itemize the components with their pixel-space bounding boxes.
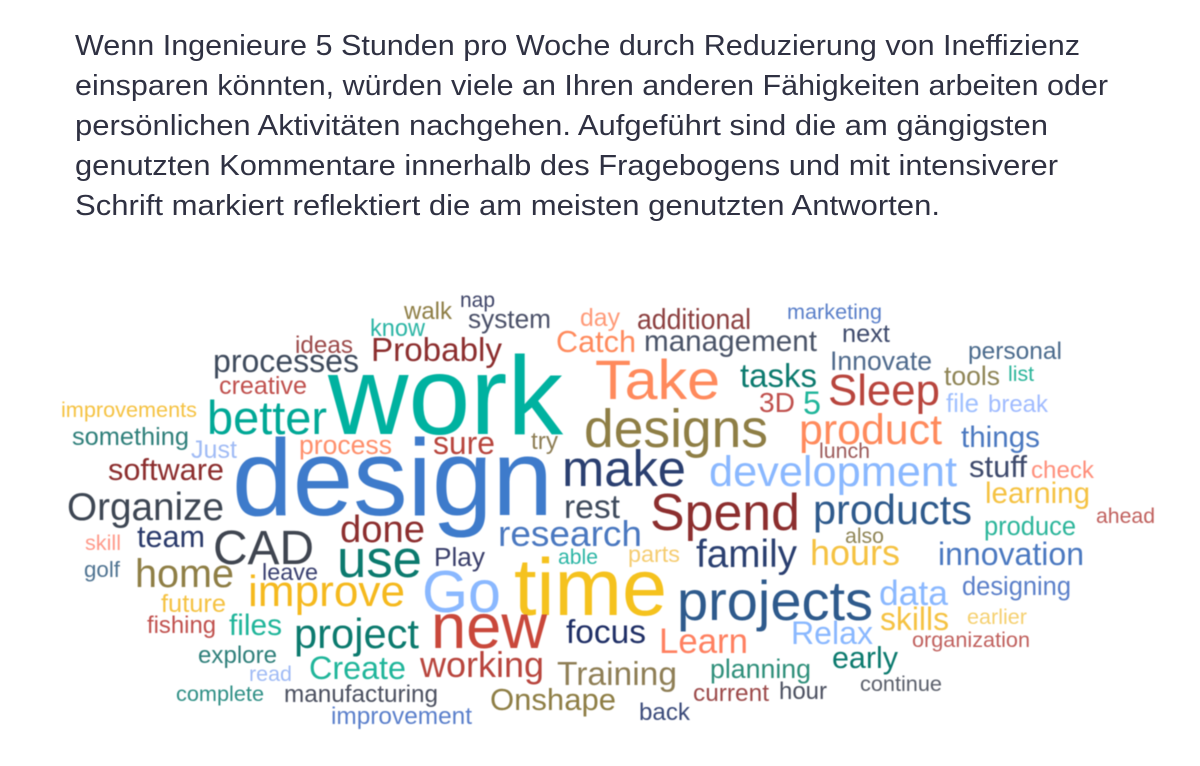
word: list: list [1008,362,1034,386]
word: next: next [842,320,890,348]
word: current: current [693,680,769,707]
word: back: back [639,699,691,726]
intro text block: einsparen könnten, würden viele an Ihren anderen Fähigkeiten arbeiten oder [75,70,1108,102]
word: day: day [580,305,621,332]
word: organization: organization [912,627,1030,652]
word: Spend: Spend [650,484,800,542]
word: product: product [799,406,942,454]
word: Relax: Relax [791,615,873,651]
word: working: working [419,644,544,685]
word: additional: additional [637,304,751,336]
word: design: design [232,417,553,539]
word: Just: Just [191,436,237,464]
word: lunch: lunch [819,439,870,463]
word: family: family [696,533,798,576]
word: system: system [468,304,551,334]
word: planning: planning [710,654,811,684]
word: file: file [946,390,979,418]
word: things: things [961,421,1040,454]
word: fishing: fishing [147,612,216,639]
word: nap: nap [460,289,495,312]
word: tools: tools [944,361,1000,391]
word: Go: Go [422,559,501,625]
word: improve: improve [248,567,405,616]
word: tasks: tasks [740,357,817,394]
word: designs: designs [584,400,768,459]
word: walk: walk [403,298,453,325]
word: home: home [135,552,234,596]
word: ahead: ahead [1096,505,1155,528]
word: files: files [229,609,282,642]
word: Onshape: Onshape [490,682,616,717]
word: produce: produce [984,513,1076,541]
word cloud [61,289,1155,730]
word: read: read [249,662,292,686]
word: marketing: marketing [787,299,882,324]
word: improvement: improvement [331,703,472,730]
word: golf: golf [84,557,121,582]
intro text block [75,30,1108,222]
word: Learn: Learn [659,622,748,661]
word: rest: rest [564,489,621,526]
word: designing: designing [962,573,1071,601]
word: done: done [340,509,425,551]
word: early: early [832,641,899,675]
word: continue: continue [860,671,942,696]
word: projects: projects [677,569,873,632]
word: use: use [337,530,422,589]
word: new: new [431,592,547,662]
word: Create: Create [309,650,406,686]
word: development: development [709,448,957,496]
word: hours: hours [810,532,900,573]
word: personal: personal [968,338,1062,365]
word: Training: Training [557,655,677,692]
word: leave: leave [262,559,318,585]
word: data: data [879,573,948,613]
word: Catch: Catch [556,325,636,359]
word: able: able [558,546,598,569]
word: Probably: Probably [371,331,502,368]
word: products: products [813,486,972,533]
word: explore: explore [198,642,277,669]
word: creative: creative [219,372,307,400]
word: earlier: earlier [967,604,1027,629]
word: research: research [498,513,642,554]
word: skill: skill [85,530,121,555]
word: focus: focus [566,614,646,651]
word: manufacturing: manufacturing [284,681,438,708]
word: software: software [108,452,224,487]
intro text block: Wenn Ingenieure 5 Stunden pro Woche durch Reduzierung von Ineffizienz [75,30,1080,62]
word: management: management [644,325,817,358]
word: skills: skills [880,601,949,637]
word: project: project [294,610,419,657]
word: team: team [137,520,205,554]
word: complete: complete [176,681,264,706]
word: better: better [207,391,327,444]
word: Organize: Organize [67,486,224,529]
word: know: know [370,316,426,342]
word: 3D: 3D [759,387,795,418]
word: parts: parts [628,541,680,567]
word: ideas: ideas [295,332,353,359]
word: sure: sure [433,425,495,461]
word: also: also [845,524,884,548]
word: processes: processes [213,343,359,379]
word: learning: learning [985,477,1090,510]
word: make: make [562,440,686,497]
word: innovation: innovation [938,536,1084,572]
word: check: check [1031,457,1095,484]
intro text block: persönlichen Aktivitäten nachgehen. Aufgeführt sind die am gängigsten [75,110,1048,142]
word: work: work [327,334,563,458]
word: CAD: CAD [213,522,314,575]
word: Play: Play [434,542,486,572]
word: process: process [299,430,392,460]
word: something: something [72,423,189,451]
word: time: time [514,543,667,633]
intro text block: Schrift markiert reflektiert die am meisten genutzten Antworten. [75,190,940,222]
word: stuff: stuff [969,449,1027,484]
word: hour: hour [779,678,827,705]
word: Innovate: Innovate [830,346,932,376]
word: Sleep: Sleep [828,366,940,415]
intro text block: genutzten Kommentare innerhalb des Fragebogens und mit intensiverer [75,150,1058,182]
word: 5: 5 [803,385,821,421]
word: future: future [161,590,226,618]
word: Take: Take [595,348,720,411]
word: break: break [988,391,1049,418]
word: try: try [531,428,559,455]
word: improvements: improvements [61,397,197,422]
